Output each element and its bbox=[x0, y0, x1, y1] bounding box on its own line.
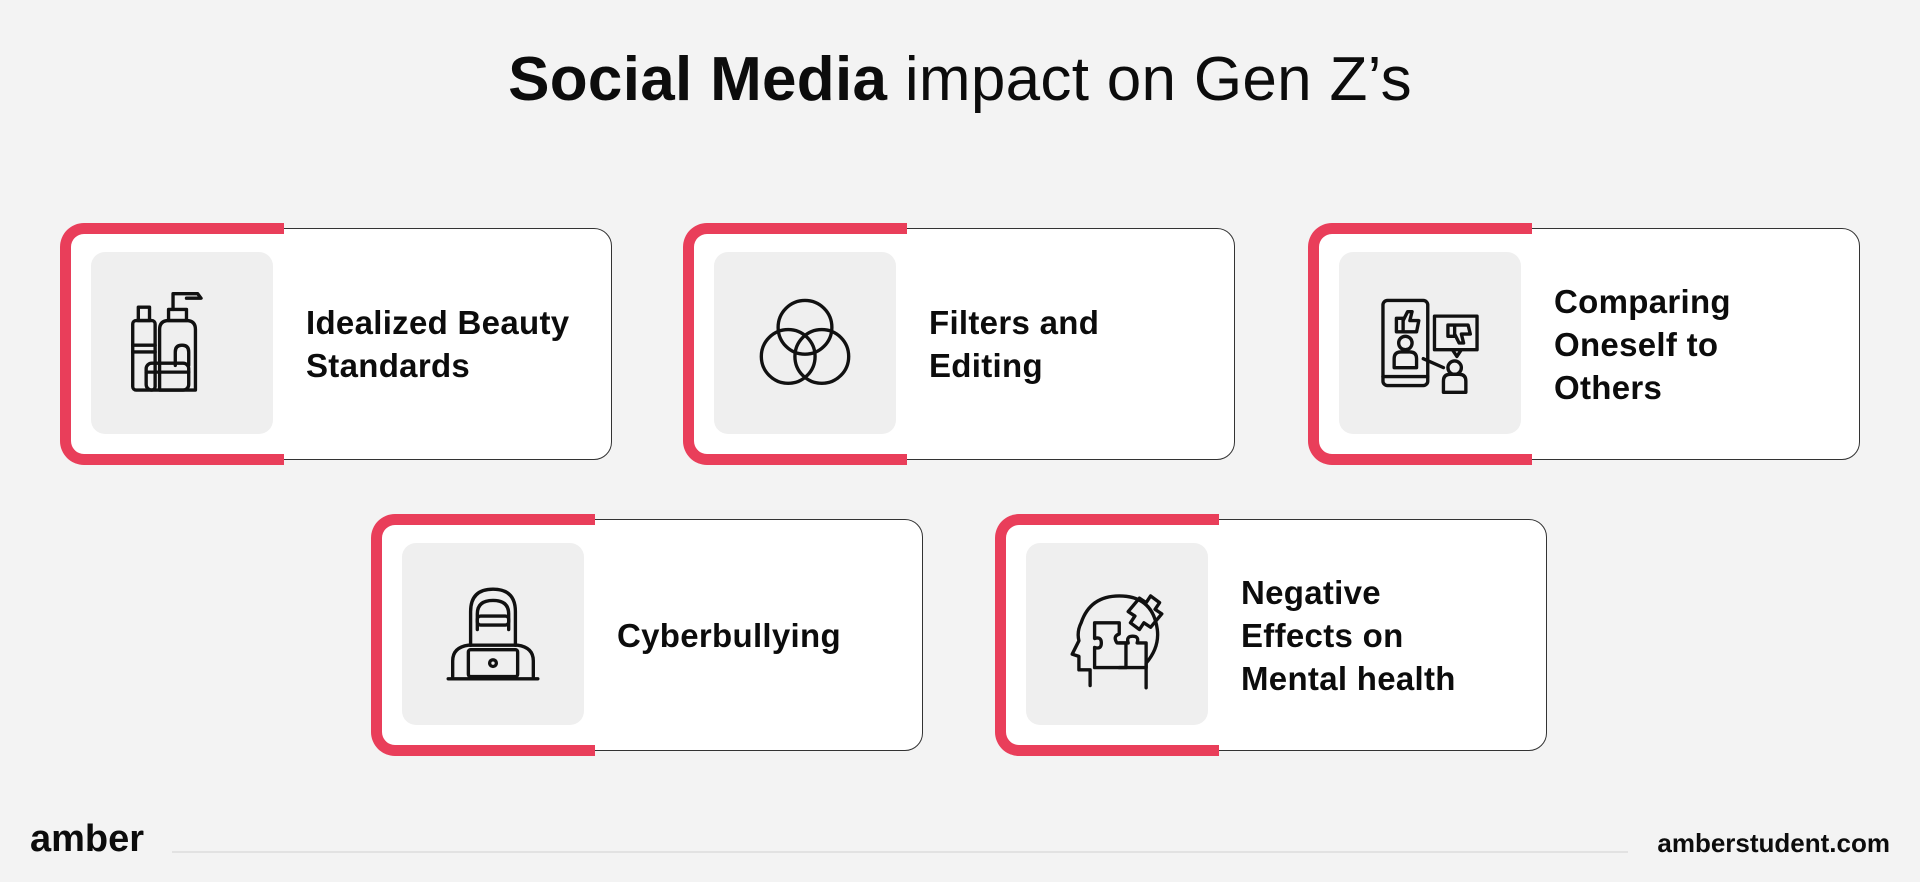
text: Standards bbox=[306, 347, 470, 384]
panel: idealized beauty bbox=[60, 223, 612, 465]
text bbox=[306, 304, 569, 384]
icon: comparison bbox=[1339, 252, 1521, 434]
text: Oneself to bbox=[1554, 326, 1718, 362]
title: Social Media impact on Gen Z’s bbox=[508, 45, 1412, 114]
text: Others bbox=[1554, 368, 1662, 406]
panel: cyberbullying bbox=[371, 514, 923, 756]
icon: venn circles bbox=[714, 252, 896, 434]
text bbox=[1241, 574, 1456, 696]
panel: comparing bbox=[1308, 223, 1860, 465]
panel: mental health bbox=[995, 514, 1547, 756]
footer logo: amber bbox=[30, 818, 144, 860]
text: Comparing bbox=[1554, 282, 1731, 320]
icon: head puzzle bbox=[1026, 543, 1208, 725]
text: Filters and bbox=[929, 304, 1099, 341]
text: Negative bbox=[1241, 574, 1381, 610]
panel: filters bbox=[683, 223, 1235, 465]
text: Effects on bbox=[1241, 616, 1404, 654]
text bbox=[1554, 282, 1731, 406]
text: Mental health bbox=[1241, 660, 1456, 696]
icon: hacker bbox=[402, 543, 584, 725]
footer url: amberstudent.com bbox=[1657, 828, 1890, 858]
text: Cyberbullying bbox=[617, 616, 841, 654]
icon: cosmetics bbox=[91, 252, 273, 434]
text bbox=[929, 304, 1099, 384]
text: Idealized Beauty bbox=[306, 304, 569, 341]
text: Editing bbox=[929, 347, 1043, 384]
